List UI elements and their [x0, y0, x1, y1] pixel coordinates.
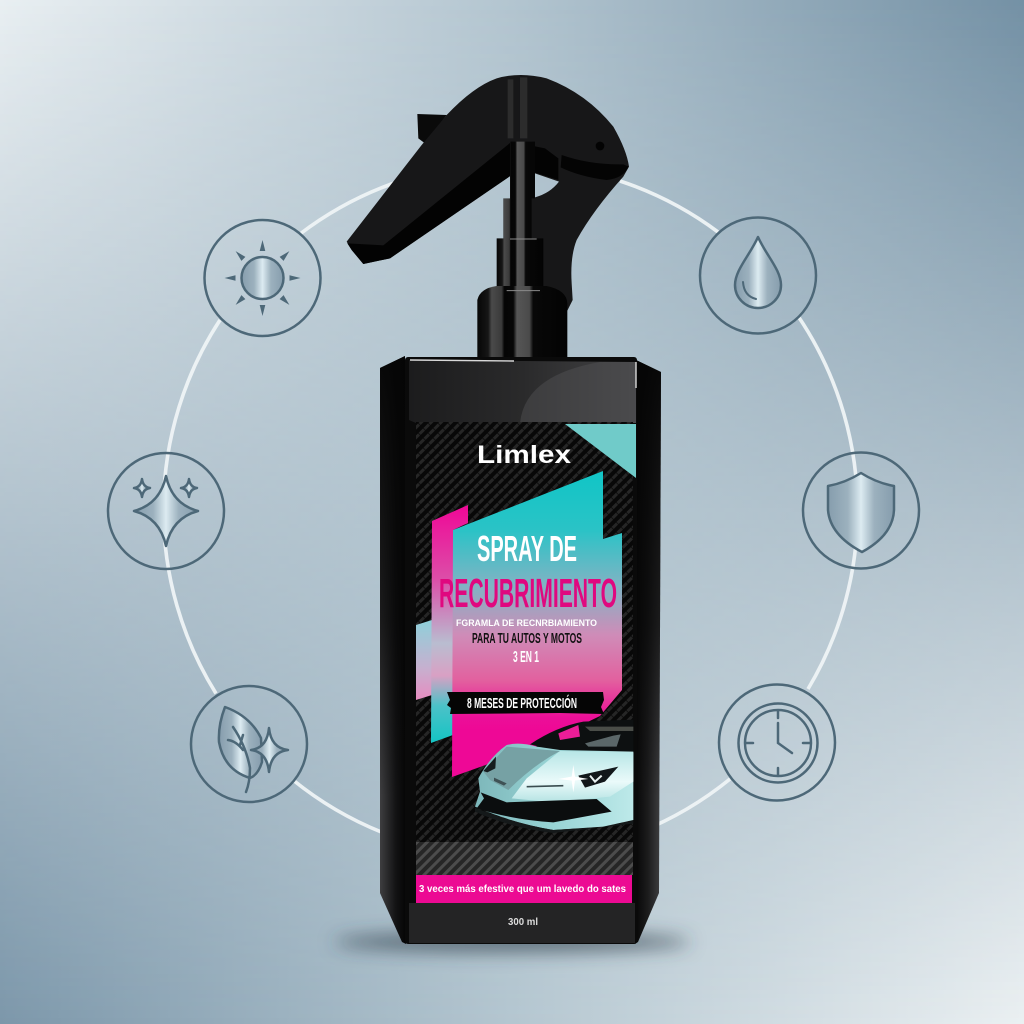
collar rim highlights	[507, 239, 540, 291]
headlight detail	[590, 776, 602, 782]
spray trigger head	[347, 75, 629, 357]
trigger body silhouette	[347, 75, 629, 311]
right facet	[635, 360, 661, 944]
bright hood area	[512, 751, 633, 802]
banner text: 8 MESES DE PROTECCIÓN	[467, 694, 577, 712]
main gradient shape	[452, 471, 622, 777]
nozzle hole	[596, 142, 604, 150]
air intake	[477, 792, 612, 822]
pink claim strip	[416, 875, 632, 903]
roof trim	[585, 727, 633, 731]
carbon lighter strip	[416, 842, 633, 875]
front nub	[417, 114, 447, 143]
teal corner	[565, 424, 636, 478]
three in one: 3 EN 1	[513, 649, 539, 666]
sub heading: FGRAMLA DE RECNRBIAMIENTO	[456, 618, 597, 628]
brush banner	[447, 692, 604, 714]
trigger underside	[347, 142, 558, 264]
volume text: 300 ml	[508, 917, 538, 928]
pump stem	[497, 142, 543, 287]
left strip	[431, 505, 468, 743]
highlight stripes	[508, 77, 527, 138]
hood vent	[527, 786, 563, 787]
icon: sun	[204, 220, 320, 336]
heading line one: SPRAY DE	[477, 528, 577, 569]
icon: leaf with sparkle	[191, 686, 307, 802]
left facet shade	[380, 356, 406, 944]
bottle ground shadow	[334, 932, 690, 952]
bottle body	[380, 356, 661, 944]
gloss curve	[520, 362, 636, 423]
car body	[475, 744, 633, 830]
side sliver	[416, 620, 432, 700]
upper front face	[409, 360, 636, 423]
icon: water drop	[700, 218, 816, 334]
carbon background	[416, 422, 633, 875]
pink window	[558, 725, 580, 740]
headlight flare	[558, 765, 588, 792]
front badge shadow	[494, 778, 507, 786]
left headlight	[483, 757, 496, 772]
right facet shade	[635, 360, 661, 944]
right headlight	[578, 767, 618, 788]
edge highlights	[410, 360, 636, 388]
cabin detail	[585, 734, 621, 747]
lower front face	[409, 903, 635, 943]
bottle neck collar	[477, 286, 567, 357]
product label	[416, 422, 636, 903]
brand name: Limlex	[477, 441, 571, 469]
nozzle band	[561, 155, 629, 180]
claim text: 3 veces más efestive que um lavedo do sates	[419, 884, 626, 895]
roof and windshield	[530, 720, 633, 753]
hood panel	[483, 747, 560, 790]
heading line two: RECUBRIMIENTO	[439, 570, 617, 616]
left facet	[380, 356, 406, 944]
splitter	[475, 808, 633, 833]
usage line: PARA TU AUTOS Y MOTOS	[472, 631, 582, 647]
icon: sparkles	[108, 453, 224, 569]
icon: shield	[803, 452, 919, 568]
orbit ring	[163, 181, 858, 834]
sports car	[475, 720, 633, 833]
icon: clock	[719, 684, 835, 800]
front panel	[405, 357, 637, 944]
